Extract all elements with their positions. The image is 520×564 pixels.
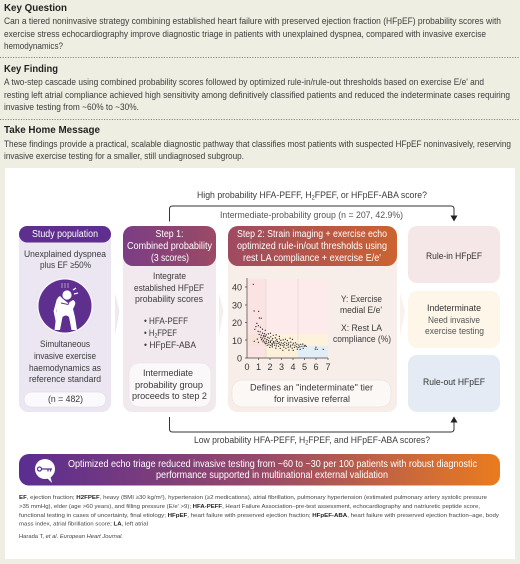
panel: graphical abstract card — [5, 168, 515, 559]
list: probability scores: 2 — [154, 334, 158, 340]
text block: take home body — [4, 139, 511, 161]
text: chart axis descriptions: Y: Exercise — [341, 293, 382, 304]
text: low probability question: 2 — [305, 440, 309, 446]
header: study population: Study population — [32, 229, 98, 240]
panel: key question — [4, 2, 501, 51]
list: probability scores: • HFpEF-ABA — [144, 339, 197, 350]
text: chart axis descriptions: compliance (%) — [333, 333, 391, 344]
text: reference standard — [29, 338, 101, 384]
text block: key finding body: A two-step cascade using combined probability scores followed by optimized rule-in/rule-out thresholds based on exercise E/e' and — [4, 77, 484, 87]
outcome: rule-out HFpEF: Rule-out HFpEF — [423, 376, 485, 387]
x axis labels: 2 — [267, 362, 273, 372]
text: chart axis descriptions: medial E/e' — [340, 304, 382, 315]
outcome: indeterminate: Need invasive — [428, 314, 480, 325]
text: reference standard: Simultaneous — [40, 338, 90, 349]
pill: indeterminate tier: for invasive referral — [274, 393, 350, 404]
list: probability scores: • HFA-PEFF — [144, 315, 188, 326]
pill: proceeds to step 2 — [129, 363, 211, 407]
footnote: abbreviations: >35 mmHg), elder (age >60 years), and filling pressure (E/e' >9); HFA-PEFF , Heart Failure Association–pre-test assessment, echocardiography and natriuretic peptide score, — [19, 504, 480, 510]
pill: proceeds to step 2: proceeds to step 2 — [132, 390, 207, 401]
outcome: indeterminate: Indeterminate — [427, 302, 481, 313]
pill: indeterminate tier: Defines an "indeterminate" tier — [250, 382, 373, 392]
pill: sample size — [24, 392, 106, 407]
header: step 1: Combined probability — [127, 241, 212, 252]
text: inclusion criteria: plus EF ≥50% — [40, 259, 91, 270]
header: study population — [19, 226, 111, 242]
citation: Harada T, et al. European Heart Journal. — [19, 534, 123, 540]
header: step 2: optimized rule-in/out thresholds using — [237, 241, 387, 252]
arrow: high probability connector to rule-in — [170, 206, 458, 222]
icon: person with dyspnea — [37, 278, 93, 334]
y axis labels: 20 — [232, 318, 242, 328]
text: integrate scores — [134, 270, 204, 304]
text: intermediate-probability group: Intermediate-probability group (n = 207, 42.9%) — [220, 209, 403, 220]
arrow: chevron step 1 to step 2 — [219, 293, 224, 336]
text: reference standard: reference standard — [29, 373, 101, 384]
panel: step 2 strain imaging — [228, 226, 397, 412]
panel: step 1 combined probability — [123, 226, 216, 412]
scatter chart: exercise E/e' versus rest LA compliance — [232, 278, 331, 372]
footnote: abbreviations: functional testing in cases of uncertainty, final etiology; HFpEF , heart failure with preserved ejection fraction; HFpEF-ABA , heart failure with preserved ejection fraction–age, body — [19, 513, 499, 519]
x axis labels: 1 — [256, 362, 261, 372]
header: step 1: Step 1: — [156, 229, 184, 240]
x axis labels — [244, 362, 331, 372]
pill: proceeds to step 2: probability group — [135, 379, 203, 390]
arrow: chevron step 2 to outcomes — [400, 293, 405, 336]
text block: key question body — [4, 16, 501, 51]
panel: study population — [19, 226, 111, 412]
outcome: rule-in HFpEF: Rule-in HFpEF — [426, 250, 482, 261]
header: step 1 — [123, 226, 216, 266]
arrow: low probability connector to rule-out — [170, 416, 458, 432]
text: chart axis descriptions — [333, 293, 391, 344]
x axis labels: 4 — [290, 362, 296, 372]
outcome: indeterminate: exercise testing — [425, 325, 484, 336]
y axis labels — [232, 282, 242, 364]
x axis labels: 3 — [279, 362, 284, 372]
text block: key question body: Can a tiered noninvasive strategy combining established heart failure with preserved ejection fraction (HFpEF) probability scores with — [4, 16, 501, 26]
y axis labels: 0 — [237, 354, 242, 364]
text: integrate scores: probability scores — [135, 293, 203, 304]
text: high probability question: 2 — [312, 196, 315, 202]
arrow: chevron study population to step 1 — [115, 293, 120, 336]
x axis labels: 7 — [325, 362, 331, 372]
heading: key finding: Key Finding — [4, 63, 58, 75]
text: reference standard: haemodynamics as — [29, 362, 101, 373]
header: step 2: Step 2: Strain imaging + exercise echo — [237, 229, 387, 240]
footnote: abbreviations — [19, 495, 499, 528]
panel: take home message — [4, 124, 511, 161]
text block: take home body: invasive exercise testing for a smaller, still undiagnosed subgroup. — [4, 151, 244, 161]
y axis labels: 10 — [232, 336, 242, 346]
outcome: rule-in HFpEF — [408, 226, 500, 283]
text block: key question body: hemodynamics? — [4, 41, 63, 51]
text: reference standard: invasive exercise — [34, 350, 96, 361]
text block: key finding body — [4, 77, 510, 112]
text: integrate scores: Integrate — [153, 270, 186, 281]
text block: key finding body: invasive testing from ~60% to ~30%. — [4, 102, 139, 112]
text: low probability question: Low probability HFA-PEFF, H — [194, 434, 315, 445]
text: banner message: performance supported in multinational external validation — [156, 470, 388, 481]
x axis labels: 6 — [313, 362, 319, 372]
list: probability scores: FPEF — [157, 327, 177, 338]
x axis labels: 5 — [302, 362, 307, 372]
text: high probability question: High probability HFA-PEFF, H — [197, 189, 320, 200]
text: banner message: Optimized echo triage reduced invasive testing from ~60 to ~30 per 100 patients with robust diagnostic — [68, 459, 477, 470]
text: high probability question: FPEF, or HFpEF-ABA score? — [315, 189, 427, 200]
text: banner message — [68, 459, 477, 481]
pill: indeterminate tier — [232, 380, 391, 407]
x axis labels: 0 — [244, 362, 250, 372]
text: integrate scores: established HFpEF — [134, 282, 204, 293]
pill: proceeds to step 2: Intermediate — [143, 367, 193, 378]
icon: key in speech bubble — [35, 459, 55, 483]
outcome: indeterminate — [408, 291, 500, 348]
heading: take home message: Take Home Message — [4, 124, 100, 136]
text: low probability question: FPEF, and HFpEF-ABA scores? — [308, 434, 430, 445]
text: inclusion criteria — [24, 248, 107, 270]
banner: key conclusion — [19, 454, 500, 486]
panel: key finding — [4, 63, 510, 112]
list: probability scores: • H — [144, 327, 157, 338]
footnote: abbreviations: EF, ejection fraction; H2FPEF , heavy (BMI ≥30 kg/m²), hypertension (≥2 medications), atrial fibrillation, pulmonary hypertension (estimated pulmonary artery systolic pressure — [19, 495, 487, 501]
pill: sample size: (n = 482) — [48, 393, 83, 404]
text: inclusion criteria: Unexplained dyspnea — [24, 248, 107, 259]
header: step 2 — [228, 226, 397, 266]
heading: key question: Key Question — [4, 2, 67, 14]
text: chart axis descriptions: X: Rest LA — [341, 322, 383, 333]
text block: key question body: exercise stress echocardiography improve diagnostic triage in patients with unexplained dyspnea, compared with invasive exercise — [4, 29, 486, 39]
outcome: rule-out HFpEF — [408, 355, 500, 412]
header: step 1: (3 scores) — [151, 253, 189, 264]
y axis labels: 30 — [232, 300, 242, 310]
header: step 2: rest LA compliance + exercise E/e' — [243, 253, 381, 264]
footnote: abbreviations: mass index, atrial fibrillation score; LA, left atrial — [19, 522, 148, 528]
y axis labels: 40 — [232, 282, 242, 292]
list: probability scores — [144, 315, 197, 350]
